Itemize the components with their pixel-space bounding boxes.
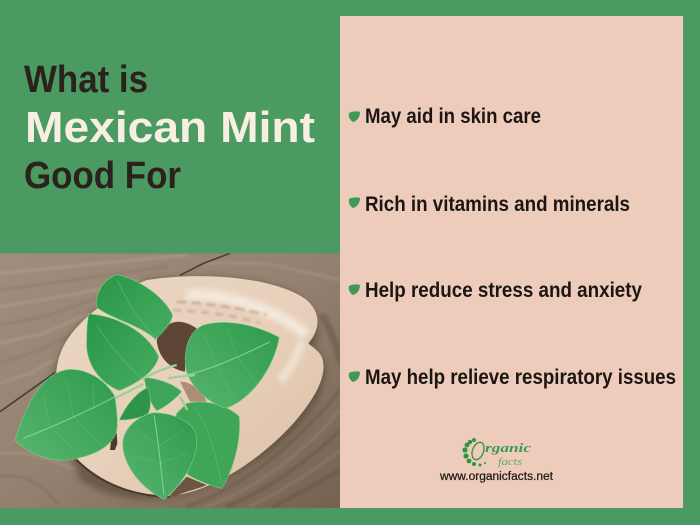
icon: leaf bullet: [349, 111, 360, 122]
leaf: top: [96, 275, 173, 339]
heading: Mexican Mint: Mexican Mint: [25, 103, 315, 152]
benefit: stress and anxiety: Help reduce stress and anxiety: [365, 279, 642, 302]
logo: Organic Facts: [439, 438, 554, 483]
website url: www.organicfacts.net: [439, 471, 554, 483]
leaf stems: [115, 365, 195, 410]
mint leaves: [15, 275, 279, 499]
benefit: skin care: May aid in skin care: [365, 105, 541, 128]
heading: What is: What is: [24, 59, 148, 101]
leaf: bottom center: [123, 413, 197, 499]
leaf: lower right: [167, 402, 240, 488]
leaf: small center pair: [119, 377, 182, 420]
logo letter O: [470, 441, 486, 461]
shell hollow: [157, 322, 197, 372]
icon: leaf bullet: [349, 197, 360, 208]
coconut shell: [50, 276, 325, 499]
icon: leaf ring: [462, 438, 486, 466]
leaf: upper left: [87, 314, 159, 391]
logo word: rganic: rganic: [485, 440, 531, 455]
panel: title block: [24, 59, 315, 197]
panel: benefits list: [340, 16, 683, 508]
logo word: facts: facts: [498, 456, 522, 468]
icon: leaf bullet: [349, 371, 360, 382]
benefit: vitamins and minerals: Rich in vitamins and minerals: [365, 193, 630, 216]
leaf: large left: [15, 369, 117, 460]
heading: Good For: Good For: [24, 155, 181, 197]
panel: photo of mint leaves on coconut shell: [0, 253, 340, 508]
wood background: [0, 253, 340, 508]
icon: leaf bullet: [349, 284, 360, 295]
leaf: right: [173, 322, 279, 408]
